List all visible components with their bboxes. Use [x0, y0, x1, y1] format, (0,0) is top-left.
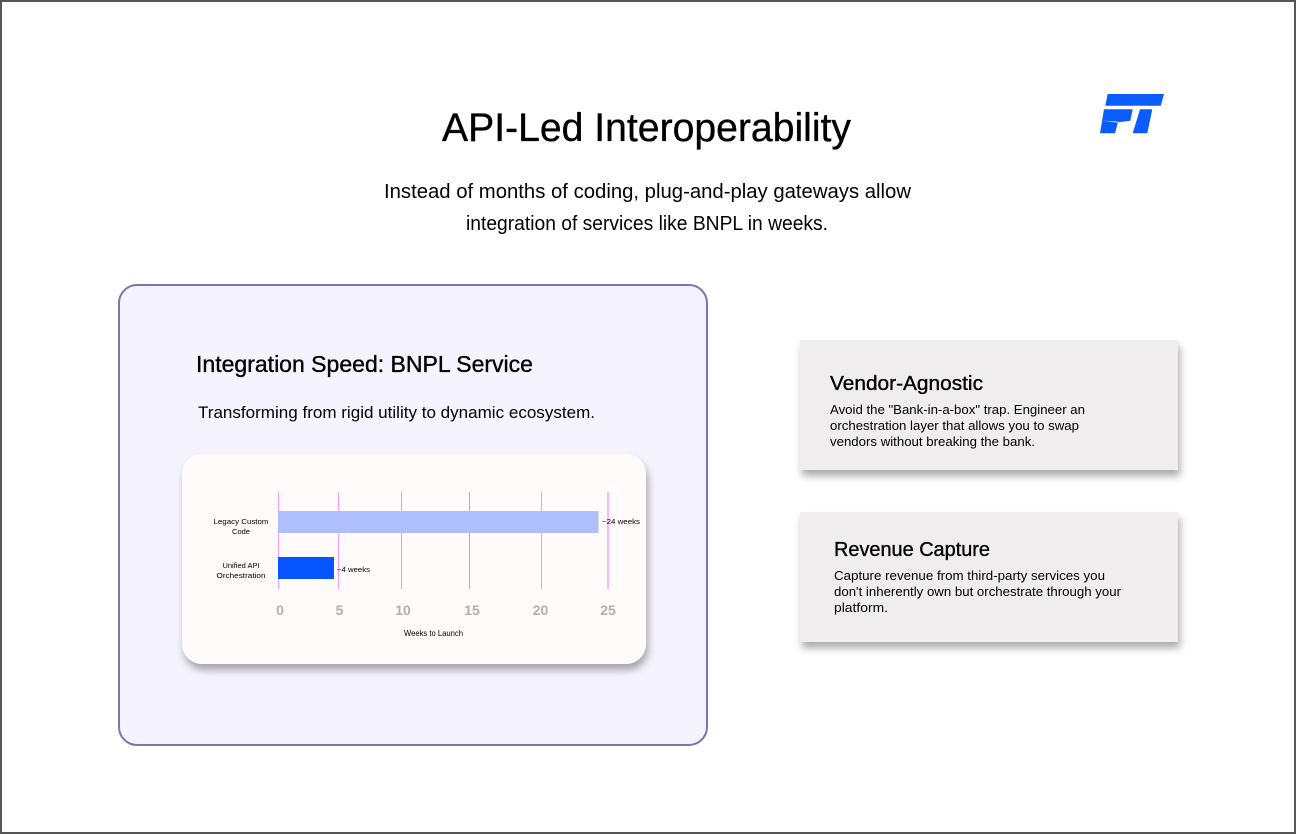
x axis ticks: 5: [336, 602, 344, 618]
card text: don't inherently own but orchestrate through your: [834, 584, 1122, 599]
card text: orchestration layer that allows you to swap: [830, 418, 1079, 433]
bar chart: [214, 492, 640, 638]
x axis ticks: 10: [395, 602, 411, 618]
x axis ticks: [276, 602, 616, 618]
card text: platform.: [834, 600, 888, 615]
category label: unified: [216, 561, 266, 580]
bar: unified API orchestration: [278, 557, 334, 579]
x axis ticks: 20: [533, 602, 548, 618]
x axis ticks: 0: [276, 602, 284, 618]
category label: unified: Unified API: [222, 561, 260, 570]
card text: vendors without breaking the bank.: [830, 434, 1035, 449]
subtitle: [384, 181, 912, 235]
card text: [830, 402, 1085, 449]
card text: [834, 568, 1122, 615]
card text: Avoid the "Bank-in-a-box" trap. Engineer an: [830, 402, 1085, 417]
category label: unified: Orchestration: [216, 571, 266, 580]
card heading: Vendor-Agnostic: [830, 373, 983, 395]
title: API-Led Interoperability: [442, 106, 851, 150]
category label: legacy: Legacy Custom: [214, 517, 268, 526]
bar value: legacy: ~24 weeks: [602, 517, 640, 526]
card text: Capture revenue from third-party services you: [834, 568, 1105, 583]
subtitle: Instead of months of coding, plug-and-play gateways allow: [384, 181, 912, 203]
card: revenue capture: [800, 512, 1178, 642]
panel heading: Integration Speed: BNPL Service: [196, 351, 533, 377]
bar value: unified: ~4 weeks: [337, 565, 370, 574]
card heading: Revenue Capture: [834, 539, 990, 561]
category label: legacy: [214, 517, 268, 536]
subtitle: integration of services like BNPL in weeks.: [466, 213, 828, 235]
x axis ticks: 15: [464, 602, 480, 618]
x axis ticks: 25: [600, 602, 616, 618]
card: vendor-agnostic: [800, 340, 1178, 470]
chart card: [182, 454, 646, 664]
panel description: Transforming from rigid utility to dynamic ecosystem.: [198, 403, 595, 422]
icon: FT logo: [1100, 94, 1164, 133]
category label: legacy: Code: [232, 527, 250, 536]
panel: integration speed: [119, 285, 707, 745]
bar: legacy custom code: [278, 511, 598, 533]
x axis title: Weeks to Launch: [404, 629, 463, 638]
